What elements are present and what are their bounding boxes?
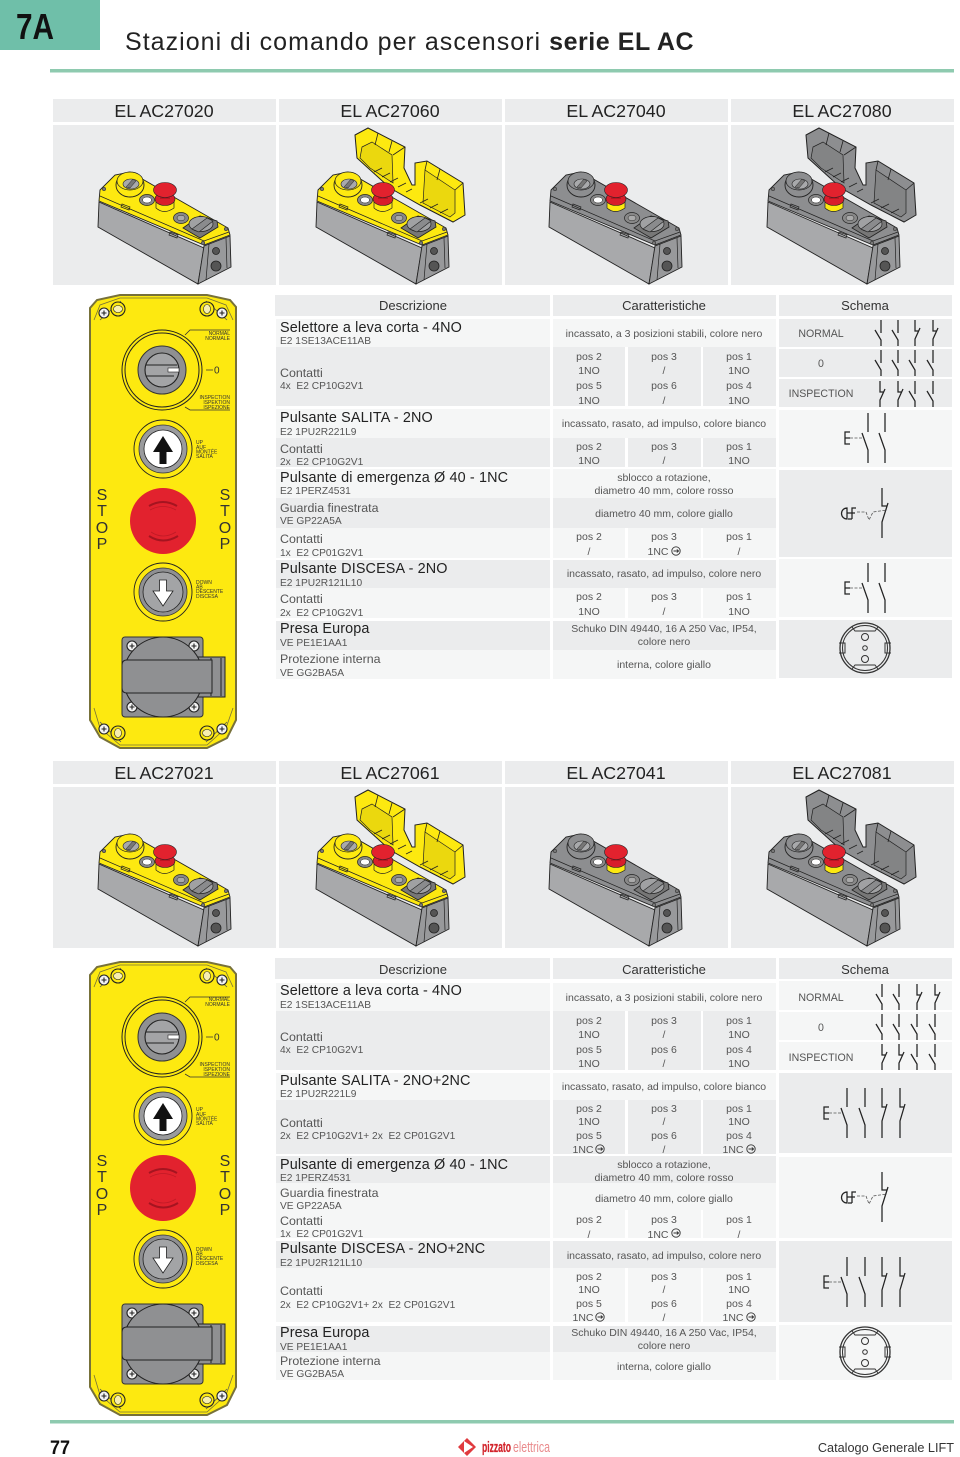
up positions: pos 4 bbox=[726, 1130, 752, 1142]
selector labels: INSPECTION bbox=[199, 1062, 230, 1068]
table 1 description column: Descrizione bbox=[379, 298, 447, 313]
contacts down: Contatti bbox=[280, 592, 323, 606]
down characteristics: incassato, rasato, ad impulso, colore nero bbox=[567, 1250, 761, 1262]
down characteristics: incassato, rasato, ad impulso, colore nero bbox=[567, 568, 761, 580]
up description: E2 1PU2R221L9 bbox=[280, 427, 357, 438]
emergency characteristics bbox=[553, 1156, 776, 1184]
up characteristics bbox=[553, 1073, 776, 1100]
up positions: pos 3 bbox=[651, 441, 677, 453]
emergency characteristics: sblocco a rotazione, bbox=[617, 472, 711, 484]
selector positions: pos 5 bbox=[576, 380, 602, 392]
down positions: pos 2 bbox=[576, 1271, 602, 1283]
product header row 1: EL AC27060 bbox=[340, 101, 440, 121]
selector labels bbox=[199, 997, 231, 1078]
selector labels: 0 bbox=[214, 366, 220, 376]
up positions: pos 5 bbox=[576, 1130, 602, 1142]
stop text: S bbox=[220, 1153, 230, 1170]
up positions: 1NO bbox=[728, 455, 750, 467]
emergency positions: pos 2 bbox=[576, 531, 602, 543]
selector positions: / bbox=[663, 365, 666, 377]
table 1 schema column bbox=[779, 295, 952, 678]
contacts selector bbox=[276, 347, 550, 406]
down labels: AB bbox=[196, 1252, 203, 1258]
selector positions: 1NO bbox=[728, 1029, 750, 1041]
selector positions: 1NO bbox=[578, 1029, 600, 1041]
table 1 description column bbox=[275, 295, 550, 679]
stop text: T bbox=[220, 1169, 230, 1186]
schema down button bbox=[779, 559, 952, 617]
selector positions: pos 5 bbox=[576, 1044, 602, 1056]
up characteristics bbox=[553, 409, 776, 438]
selector labels: INSPECTION bbox=[199, 395, 230, 401]
schema emergency bbox=[779, 470, 952, 557]
protection description bbox=[276, 650, 550, 679]
schema selector: INSPECTION bbox=[789, 1052, 853, 1064]
up positions bbox=[553, 1100, 776, 1156]
selector description: Selettore a leva corta - 4NO bbox=[280, 320, 462, 336]
guard description: Guardia finestrata bbox=[280, 1186, 379, 1200]
selector positions: pos 2 bbox=[576, 1015, 602, 1027]
up characteristics: incassato, rasato, ad impulso, colore bianco bbox=[562, 1081, 766, 1093]
contacts emergency: Contatti bbox=[280, 532, 323, 546]
emergency positions: / bbox=[738, 546, 741, 558]
table 2 schema column bbox=[779, 958, 952, 1380]
emergency positions: pos 1 bbox=[726, 531, 752, 543]
product header row 1 bbox=[53, 99, 954, 122]
emergency positions: 1NC bbox=[647, 546, 669, 558]
contacts up: 2x E2 CP10G2V1+ 2x E2 CP01G2V1 bbox=[280, 1131, 456, 1142]
up positions bbox=[553, 438, 776, 467]
selector characteristics: incassato, a 3 posizioni stabili, colore nero bbox=[566, 992, 762, 1004]
table 2 characteristics column: Caratteristiche bbox=[622, 962, 706, 977]
table 1 characteristics column bbox=[553, 295, 776, 679]
schema selector: NORMAL bbox=[798, 992, 844, 1004]
selector positions: pos 4 bbox=[726, 1044, 752, 1056]
up positions: 1NO bbox=[578, 1116, 600, 1128]
table 1 schema column: Schema bbox=[841, 298, 890, 313]
product header row 1: EL AC27040 bbox=[566, 101, 666, 121]
product images row 1 bbox=[53, 125, 954, 285]
selector positions: pos 3 bbox=[651, 1015, 677, 1027]
emergency characteristics: diametro 40 mm, colore rosso bbox=[595, 1172, 734, 1184]
down positions: 1NO bbox=[728, 1284, 750, 1296]
stop text: T bbox=[97, 1169, 107, 1186]
selector positions bbox=[553, 347, 776, 407]
emergency description: E2 1PERZ4531 bbox=[280, 486, 351, 497]
selector description: E2 1SE13ACE11AB bbox=[280, 1000, 371, 1011]
stop text bbox=[96, 1153, 231, 1219]
down characteristics bbox=[553, 1241, 776, 1268]
product header row 2: EL AC27041 bbox=[566, 763, 666, 783]
down positions: 1NC bbox=[572, 1312, 594, 1324]
stop text: O bbox=[219, 1186, 231, 1203]
contacts down bbox=[276, 1268, 550, 1322]
socket description: VE PE1E1AA1 bbox=[280, 1342, 348, 1353]
contacts selector: Contatti bbox=[280, 1030, 323, 1044]
stop text: T bbox=[220, 503, 230, 520]
protection description: VE GG2BA5A bbox=[280, 668, 344, 679]
product header row 1: EL AC27020 bbox=[114, 101, 214, 121]
up positions: 1NC bbox=[722, 1144, 744, 1156]
guard description: VE GP22A5A bbox=[280, 516, 342, 527]
stop text: O bbox=[96, 520, 108, 537]
down positions: pos 6 bbox=[651, 1298, 677, 1310]
selector labels bbox=[199, 331, 231, 411]
selector positions: / bbox=[663, 395, 666, 407]
emergency description bbox=[276, 1156, 550, 1184]
down positions: / bbox=[663, 606, 666, 618]
down description bbox=[276, 560, 550, 589]
stop text: T bbox=[97, 503, 107, 520]
up labels: UP bbox=[196, 440, 204, 446]
logo pizzato elettrica: elettrica bbox=[513, 1439, 550, 1456]
product header row 2 bbox=[53, 761, 954, 784]
guard description bbox=[276, 1183, 550, 1212]
station EL AC27081 grey with lid bbox=[767, 790, 916, 946]
schema selector bbox=[779, 981, 952, 1070]
protection description: Protezione interna bbox=[280, 1354, 381, 1368]
selector description bbox=[276, 319, 550, 347]
down positions: pos 1 bbox=[726, 1271, 752, 1283]
down positions bbox=[553, 588, 776, 618]
guard characteristics: diametro 40 mm, colore giallo bbox=[595, 508, 733, 520]
guard description bbox=[276, 498, 550, 528]
schema selector: NORMAL bbox=[798, 328, 844, 340]
down labels bbox=[196, 1247, 224, 1267]
stop text: S bbox=[220, 487, 230, 504]
product header row 2: EL AC27061 bbox=[340, 763, 440, 783]
contacts down: Contatti bbox=[280, 1284, 323, 1298]
protection characteristics bbox=[553, 650, 776, 679]
emergency positions: / bbox=[588, 1229, 591, 1241]
logo pizzato elettrica bbox=[458, 1438, 550, 1456]
contacts selector bbox=[276, 1011, 550, 1070]
up description: E2 1PU2R221L9 bbox=[280, 1089, 357, 1100]
down positions bbox=[553, 1268, 776, 1324]
down positions: 1NO bbox=[578, 606, 600, 618]
socket characteristics: colore nero bbox=[638, 636, 690, 648]
down positions: / bbox=[663, 1312, 666, 1324]
selector positions: 1NO bbox=[728, 365, 750, 377]
up positions: pos 1 bbox=[726, 441, 752, 453]
down labels: DOWN bbox=[196, 580, 212, 586]
catalog name: Catalogo Generale LIFT bbox=[818, 1441, 954, 1455]
selector positions: pos 1 bbox=[726, 351, 752, 363]
protection characteristics: interna, colore giallo bbox=[617, 1361, 711, 1373]
emergency positions: pos 3 bbox=[651, 1214, 677, 1226]
down positions: pos 3 bbox=[651, 1271, 677, 1283]
emergency positions: 1NC bbox=[647, 1229, 669, 1241]
stop text: P bbox=[220, 1202, 230, 1219]
selector positions: pos 3 bbox=[651, 351, 677, 363]
down positions: 1NO bbox=[578, 1284, 600, 1296]
selector description: E2 1SE13ACE11AB bbox=[280, 336, 371, 347]
contacts selector: 4x E2 CP10G2V1 bbox=[280, 1045, 364, 1056]
selector labels: ISPEZIONE bbox=[203, 1072, 231, 1078]
emergency positions: pos 3 bbox=[651, 531, 677, 543]
up positions: pos 2 bbox=[576, 1103, 602, 1115]
front panel 2 bbox=[90, 962, 236, 1415]
selector labels: NORMALE bbox=[205, 1002, 231, 1008]
up description bbox=[276, 409, 550, 438]
product header row 2: EL AC27081 bbox=[792, 763, 892, 783]
up positions: 1NO bbox=[728, 1116, 750, 1128]
emergency description: Pulsante di emergenza Ø 40 - 1NC bbox=[280, 1157, 508, 1173]
product images row 2 bbox=[53, 787, 954, 948]
down positions: pos 3 bbox=[651, 591, 677, 603]
selector positions: 1NO bbox=[728, 1058, 750, 1070]
up positions: 1NC bbox=[572, 1144, 594, 1156]
emergency characteristics: sblocco a rotazione, bbox=[617, 1159, 711, 1171]
table 2 description column: Descrizione bbox=[379, 962, 447, 977]
down characteristics bbox=[553, 560, 776, 588]
up positions: / bbox=[663, 1144, 666, 1156]
down labels: DOWN bbox=[196, 1247, 212, 1253]
down positions: pos 4 bbox=[726, 1298, 752, 1310]
contacts up bbox=[276, 438, 550, 468]
socket characteristics: Schuko DIN 49440, 16 A 250 Vac, IP54, bbox=[571, 1327, 757, 1339]
chapter tab 7A bbox=[0, 0, 100, 50]
up labels bbox=[196, 1107, 218, 1127]
selector positions: pos 6 bbox=[651, 380, 677, 392]
schema socket bbox=[779, 1325, 952, 1380]
contacts up bbox=[276, 1100, 550, 1154]
product header row 2: EL AC27021 bbox=[114, 763, 214, 783]
station EL AC27021 yellow bbox=[98, 834, 231, 946]
up labels: AUF bbox=[196, 1112, 206, 1118]
socket description: VE PE1E1AA1 bbox=[280, 638, 348, 649]
stop text: P bbox=[97, 536, 107, 553]
down description: E2 1PU2R121L10 bbox=[280, 578, 362, 589]
guard description: VE GP22A5A bbox=[280, 1201, 342, 1212]
emergency positions bbox=[553, 528, 776, 558]
schema selector: 0 bbox=[818, 1022, 824, 1034]
schema selector: 0 bbox=[818, 358, 824, 370]
schema up button bbox=[779, 1073, 952, 1153]
down positions: pos 1 bbox=[726, 591, 752, 603]
up labels: MONTÉE bbox=[196, 1116, 218, 1122]
down positions: pos 5 bbox=[576, 1298, 602, 1310]
contacts selector: Contatti bbox=[280, 366, 323, 380]
selector positions: / bbox=[663, 1058, 666, 1070]
up labels bbox=[196, 440, 218, 460]
down labels bbox=[196, 580, 224, 600]
down labels: DISCESA bbox=[196, 1261, 219, 1267]
contacts emergency: 1x E2 CP01G2V1 bbox=[280, 1229, 364, 1240]
emergency positions: / bbox=[588, 546, 591, 558]
socket description: Presa Europa bbox=[280, 621, 370, 637]
emergency positions bbox=[553, 1210, 776, 1241]
selector positions: 1NO bbox=[578, 365, 600, 377]
protection description: Protezione interna bbox=[280, 652, 381, 666]
socket description bbox=[276, 621, 550, 650]
selector positions: pos 1 bbox=[726, 1015, 752, 1027]
protection description bbox=[276, 1352, 550, 1380]
up labels: MONTÉE bbox=[196, 448, 218, 456]
station EL AC27020 yellow bbox=[98, 172, 231, 284]
contacts up: Contatti bbox=[280, 442, 323, 456]
selector description: Selettore a leva corta - 4NO bbox=[280, 983, 462, 999]
schema down button bbox=[779, 1241, 952, 1322]
socket characteristics: Schuko DIN 49440, 16 A 250 Vac, IP54, bbox=[571, 623, 757, 635]
stop text: P bbox=[220, 536, 230, 553]
station EL AC27040 grey bbox=[549, 172, 682, 284]
stop text: S bbox=[97, 1153, 107, 1170]
up positions: / bbox=[663, 455, 666, 467]
contacts emergency: Contatti bbox=[280, 1214, 323, 1228]
schema up button bbox=[779, 410, 952, 467]
selector positions: 1NO bbox=[578, 1058, 600, 1070]
emergency description: Pulsante di emergenza Ø 40 - 1NC bbox=[280, 470, 508, 486]
socket characteristics bbox=[553, 1326, 776, 1352]
contacts up: Contatti bbox=[280, 1116, 323, 1130]
protection description: VE GG2BA5A bbox=[280, 1369, 344, 1380]
up positions: / bbox=[663, 1116, 666, 1128]
product header row 1: EL AC27080 bbox=[792, 101, 892, 121]
selector characteristics bbox=[553, 983, 776, 1011]
guard characteristics: diametro 40 mm, colore giallo bbox=[595, 1193, 733, 1205]
contacts emergency bbox=[276, 528, 550, 559]
selector positions: pos 4 bbox=[726, 380, 752, 392]
down description: Pulsante DISCESA - 2NO+2NC bbox=[280, 1241, 485, 1257]
schema selector bbox=[779, 319, 952, 407]
station EL AC27041 grey bbox=[549, 834, 682, 946]
stop text: O bbox=[96, 1186, 108, 1203]
down description: Pulsante DISCESA - 2NO bbox=[280, 561, 448, 577]
up description: Pulsante SALITA - 2NO bbox=[280, 410, 433, 426]
selector positions: 1NO bbox=[578, 395, 600, 407]
up positions: pos 1 bbox=[726, 1103, 752, 1115]
down positions: 1NO bbox=[728, 606, 750, 618]
stop text bbox=[96, 487, 231, 553]
selector characteristics bbox=[553, 319, 776, 347]
contacts up: 2x E2 CP10G2V1 bbox=[280, 457, 364, 468]
selector labels: ISPEKTION bbox=[203, 1067, 230, 1073]
selector description bbox=[276, 983, 550, 1011]
emergency characteristics bbox=[553, 469, 776, 498]
down positions: 1NC bbox=[722, 1312, 744, 1324]
logo pizzato elettrica: pizzato bbox=[482, 1439, 511, 1456]
contacts down: 2x E2 CP10G2V1 bbox=[280, 608, 364, 619]
guard characteristics bbox=[553, 1183, 776, 1210]
stop text: P bbox=[97, 1202, 107, 1219]
schema emergency bbox=[779, 1157, 952, 1238]
stop text: S bbox=[97, 487, 107, 504]
stop text: O bbox=[219, 520, 231, 537]
table 2 description column bbox=[275, 958, 550, 1380]
up description bbox=[276, 1073, 550, 1100]
up positions: pos 2 bbox=[576, 441, 602, 453]
contacts emergency: 1x E2 CP01G2V1 bbox=[280, 548, 364, 559]
selector labels: ISPEKTION bbox=[203, 400, 230, 406]
up description: Pulsante SALITA - 2NO+2NC bbox=[280, 1073, 471, 1089]
up labels: UP bbox=[196, 1107, 204, 1113]
up positions: 1NO bbox=[578, 455, 600, 467]
down labels: DESCENTE bbox=[196, 589, 224, 595]
up labels: AUF bbox=[196, 445, 206, 451]
station EL AC27080 grey with lid bbox=[767, 128, 916, 284]
up characteristics: incassato, rasato, ad impulso, colore bianco bbox=[562, 418, 766, 430]
table 2 characteristics column bbox=[553, 958, 776, 1380]
up labels: SALITA bbox=[196, 454, 214, 460]
protection characteristics bbox=[553, 1352, 776, 1380]
selector positions bbox=[553, 1011, 776, 1070]
down description: E2 1PU2R121L10 bbox=[280, 1258, 362, 1269]
emergency positions: / bbox=[738, 1229, 741, 1241]
front panel 1 bbox=[90, 295, 236, 748]
socket description: Presa Europa bbox=[280, 1325, 370, 1341]
table 1 characteristics column: Caratteristiche bbox=[622, 298, 706, 313]
contacts down: 2x E2 CP10G2V1+ 2x E2 CP01G2V1 bbox=[280, 1300, 456, 1311]
down positions: / bbox=[663, 1284, 666, 1296]
down description bbox=[276, 1241, 550, 1269]
selector labels: NORMAL bbox=[209, 331, 230, 337]
emergency description: E2 1PERZ4531 bbox=[280, 1173, 351, 1184]
guard characteristics bbox=[553, 498, 776, 528]
station EL AC27060 yellow with lid bbox=[316, 128, 465, 284]
up positions: pos 3 bbox=[651, 1103, 677, 1115]
selector positions: / bbox=[663, 1029, 666, 1041]
socket characteristics: colore nero bbox=[638, 1340, 690, 1352]
title: Stazioni di comando per ascensori serie EL AC bbox=[125, 28, 694, 56]
contacts emergency bbox=[276, 1210, 550, 1240]
selector labels: NORMAL bbox=[209, 997, 230, 1003]
schema selector: INSPECTION bbox=[789, 388, 853, 400]
schema socket bbox=[779, 620, 952, 678]
selector labels: ISPEZIONE bbox=[203, 405, 231, 411]
guard description: Guardia finestrata bbox=[280, 501, 379, 515]
table 2 schema column: Schema bbox=[841, 962, 890, 977]
contacts down bbox=[276, 588, 550, 619]
emergency characteristics: diametro 40 mm, colore rosso bbox=[595, 485, 734, 497]
down labels: DISCESA bbox=[196, 594, 219, 600]
selector labels: NORMALE bbox=[205, 336, 231, 342]
emergency positions: pos 2 bbox=[576, 1214, 602, 1226]
selector characteristics: incassato, a 3 posizioni stabili, colore nero bbox=[566, 328, 762, 340]
selector positions: pos 2 bbox=[576, 351, 602, 363]
down labels: DESCENTE bbox=[196, 1256, 224, 1262]
up positions: pos 6 bbox=[651, 1130, 677, 1142]
contacts selector: 4x E2 CP10G2V1 bbox=[280, 381, 364, 392]
station EL AC27061 yellow with lid bbox=[316, 790, 465, 946]
emergency description bbox=[276, 469, 550, 498]
down positions: pos 2 bbox=[576, 591, 602, 603]
up labels: SALITA bbox=[196, 1121, 214, 1127]
down labels: AB bbox=[196, 584, 203, 590]
chapter tab 7A: 7A bbox=[16, 6, 54, 47]
selector labels: 0 bbox=[214, 1032, 220, 1044]
socket description bbox=[276, 1325, 550, 1353]
socket characteristics bbox=[553, 621, 776, 650]
emergency positions: pos 1 bbox=[726, 1214, 752, 1226]
protection characteristics: interna, colore giallo bbox=[617, 659, 711, 671]
selector positions: 1NO bbox=[728, 395, 750, 407]
selector positions: pos 6 bbox=[651, 1044, 677, 1056]
